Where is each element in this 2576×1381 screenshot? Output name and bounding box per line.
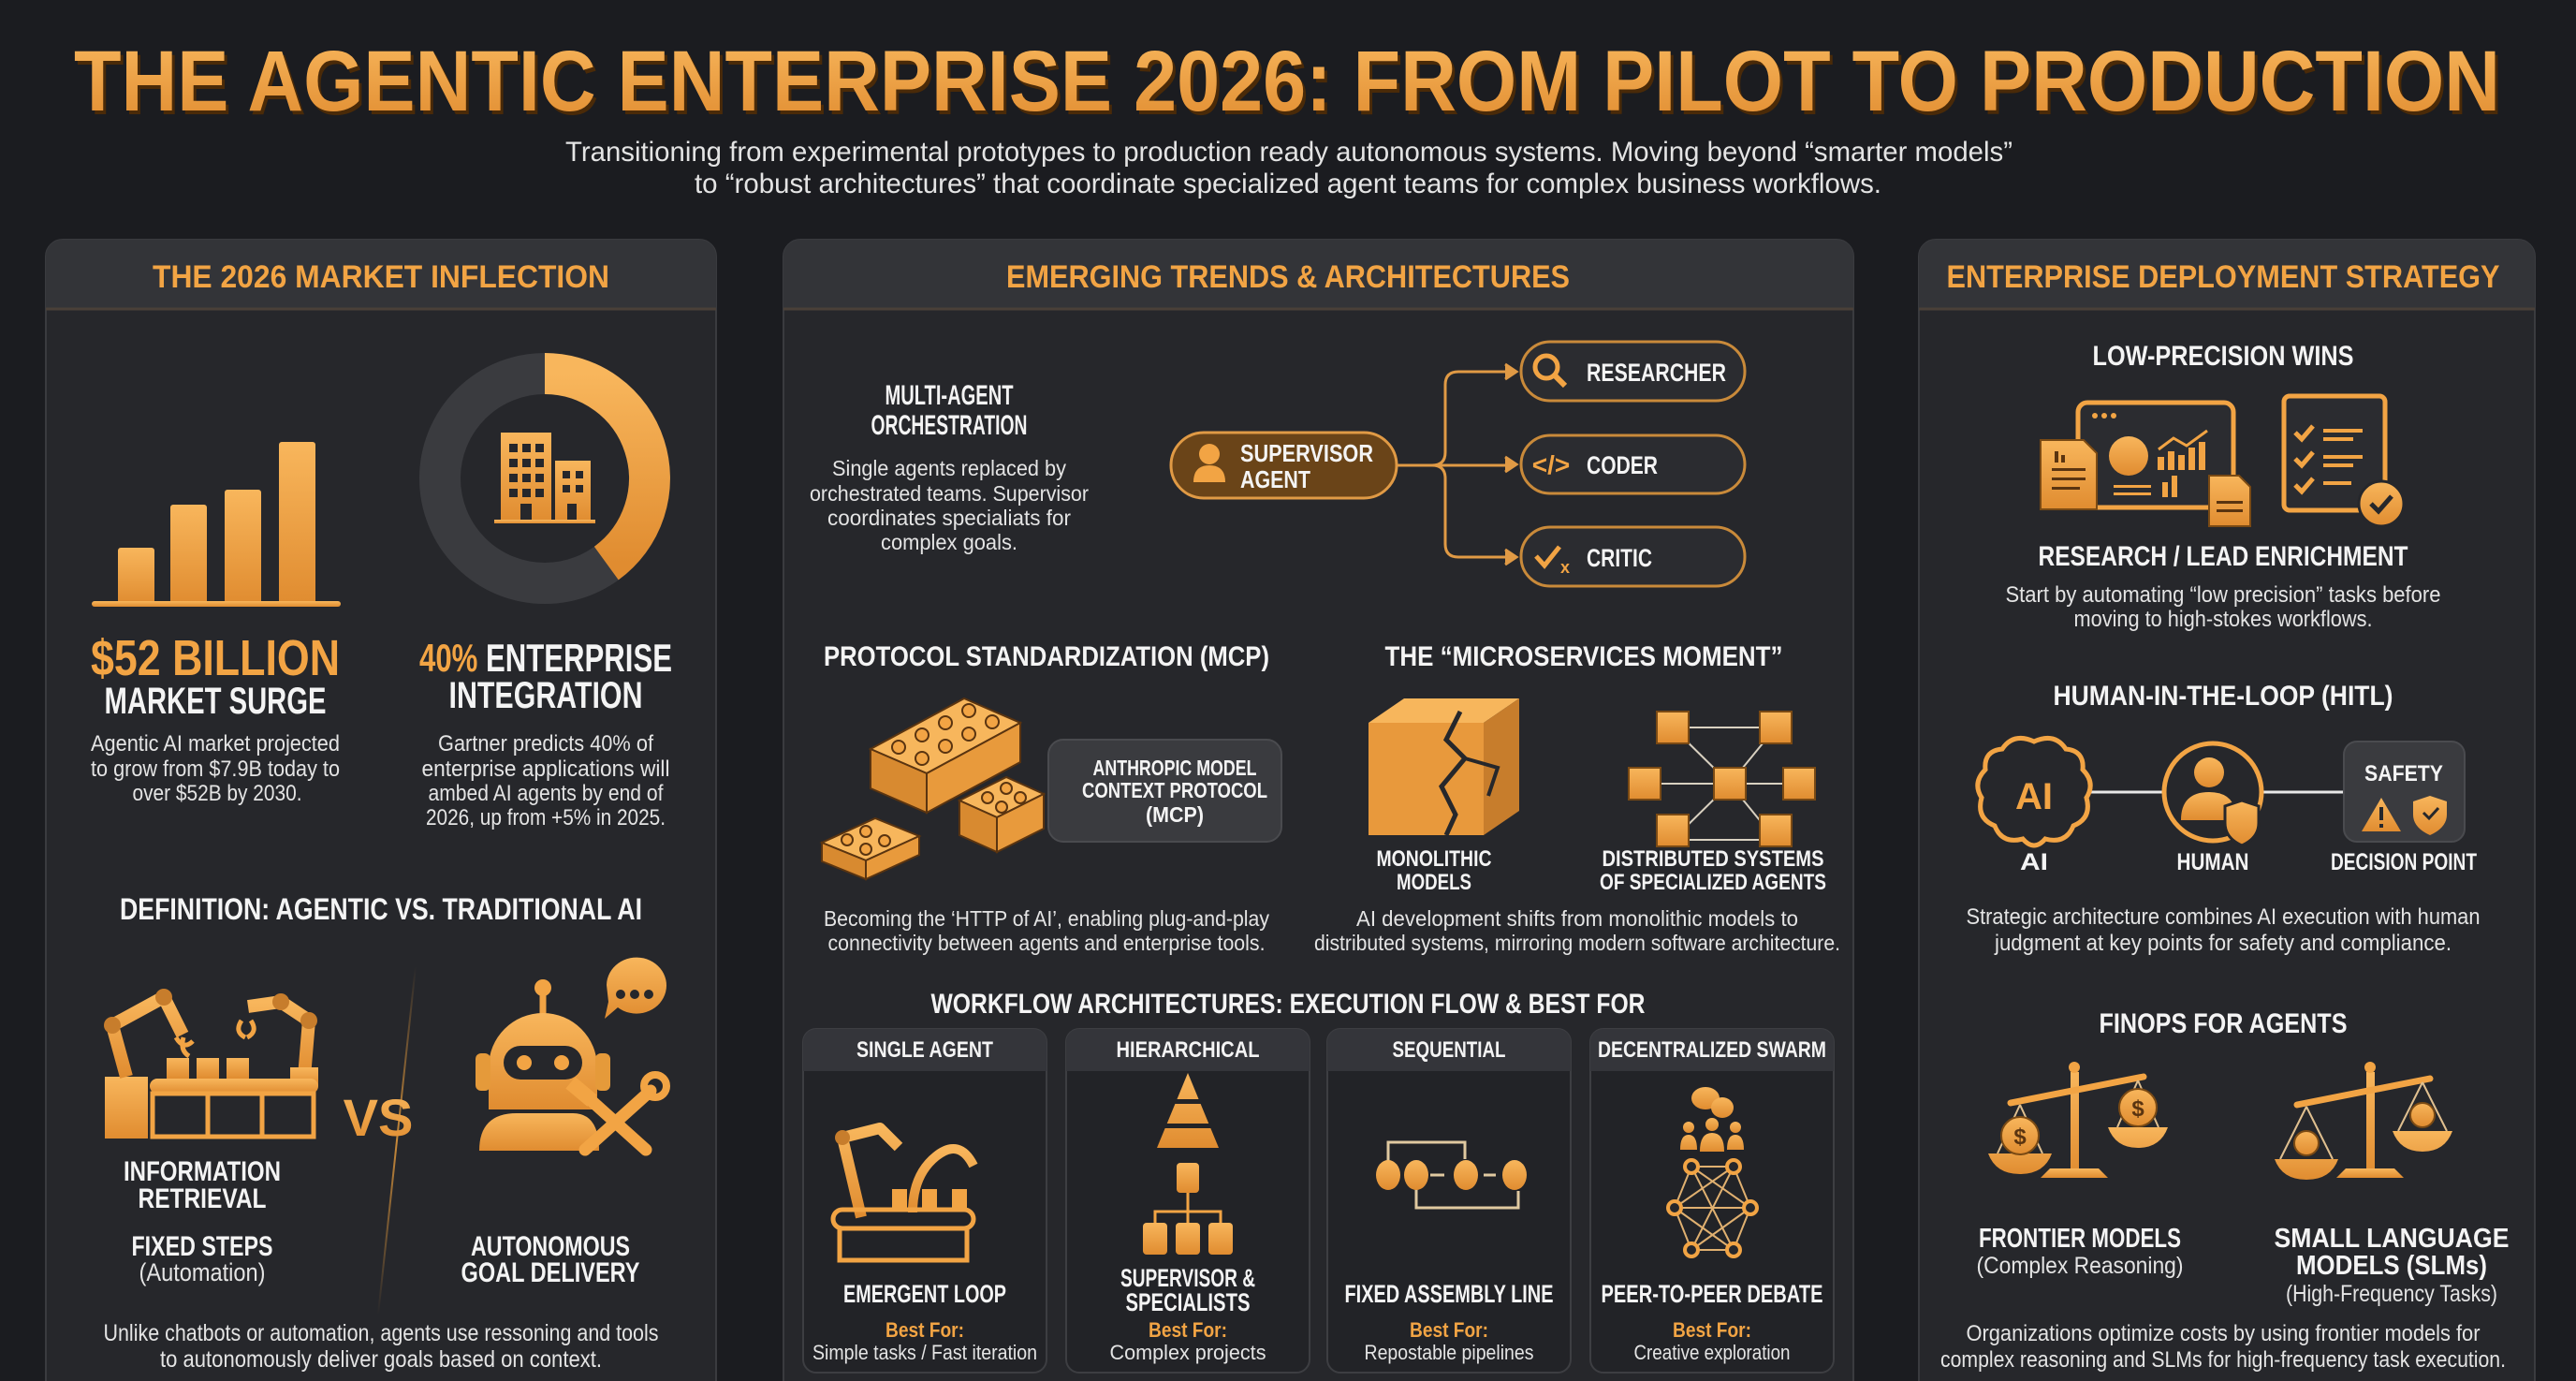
card: hierarchical: [1066, 1029, 1310, 1373]
heading: human in the loop: HUMAN-IN-THE-LOOP (HITL): [2054, 681, 2393, 712]
pill: coder: </>: [1532, 450, 1570, 479]
labels: traditional: (Automation): [139, 1258, 266, 1286]
heading: protocol standardization: PROTOCOL STANDARDIZATION (MCP): [824, 641, 1269, 672]
card: single agent: [803, 1029, 1046, 1373]
labels: traditional: [124, 1156, 281, 1286]
heading: deployment strategy: ENTERPRISE DEPLOYMENT STRATEGY: [1947, 259, 2500, 295]
research text: Start by automating “low precision” tasks before: [2005, 582, 2441, 608]
heading: finops: FINOPS FOR AGENTS: [2099, 1008, 2348, 1039]
vs divider: [344, 966, 416, 1315]
hitl labels: DECISION POINT: [2331, 849, 2477, 875]
card: decentralized swarm: [1590, 1029, 1834, 1373]
heading: workflow architectures: WORKFLOW ARCHITECTURES: EXECUTION FLOW & BEST FOR: [930, 989, 1646, 1020]
icon: ai brain: [1978, 738, 2090, 845]
stat: 40% enterprise: Gartner predicts 40% of: [438, 731, 653, 757]
mcp text: [824, 906, 1269, 955]
hitl diagram: [1978, 738, 2465, 845]
research text: [2005, 541, 2441, 632]
donut chart 40%: [440, 374, 650, 583]
labels: small language models: [2275, 1224, 2509, 1307]
labels: small language models: SMALL LANGUAGE: [2275, 1224, 2509, 1254]
multi-agent text: Single agents replaced by: [832, 456, 1066, 480]
card: sequential: Best For:: [1410, 1318, 1488, 1342]
heading: microservices moment: THE “MICROSERVICES MOMENT”: [1385, 641, 1782, 672]
finops text: complex reasoning and SLMs for high-frequency task execution.: [1940, 1347, 2506, 1373]
icon: factory robot arms: [104, 989, 318, 1139]
labels: agentic: AUTONOMOUS: [471, 1231, 630, 1262]
card: hierarchical: HIERARCHICAL: [1116, 1037, 1260, 1063]
heading: emerging trends: EMERGING TRENDS & ARCHITECTURES: [1006, 259, 1570, 295]
labels: frontier models: FRONTIER MODELS: [1979, 1224, 2181, 1254]
icon: safety decision box: SAFETY: [2364, 761, 2443, 786]
panel: deployment strategy: [1919, 240, 2535, 1381]
labels: monolithic vs distributed: MODELS: [1397, 870, 1471, 895]
stat: 40% enterprise: 40% ENTERPRISE: [419, 636, 672, 680]
icon: robot with tools: [476, 958, 666, 1151]
labels: monolithic vs distributed: OF SPECIALIZED AGENTS: [1600, 870, 1826, 895]
microservices text: AI development shifts from monolithic models to: [1356, 906, 1798, 931]
stat: $52 billion: to grow from $7.9B today to: [91, 757, 340, 782]
pill: researcher: [1521, 342, 1745, 401]
icon: monolithic cube: [1368, 698, 1519, 835]
research text: RESEARCH / LEAD ENRICHMENT: [2039, 541, 2408, 572]
pill: critic: [1521, 527, 1745, 586]
panel: market inflection: [46, 240, 716, 1381]
icon: scale slm: [2275, 1062, 2452, 1180]
icon: buildings: [494, 433, 595, 523]
labels: frontier models: [1977, 1224, 2183, 1279]
card: decentralized swarm: Best For:: [1673, 1318, 1751, 1342]
multi-agent text: MULTI-AGENT: [886, 380, 1013, 411]
stat: 40% enterprise: [419, 636, 672, 830]
supervisor agent pill: AGENT: [1240, 465, 1310, 493]
card: hierarchical: Complex projects: [1110, 1341, 1266, 1364]
icon: checklist: [2284, 396, 2404, 526]
card: single agent: Simple tasks / Fast iteration: [812, 1341, 1037, 1364]
pill: critic: x: [1560, 558, 1570, 577]
mcp callout box: CONTEXT PROTOCOL: [1082, 778, 1267, 802]
stat: 40% enterprise: INTEGRATION: [449, 675, 642, 716]
icon: dashboard: [2041, 403, 2250, 526]
stat: $52 billion: [91, 630, 340, 806]
supervisor agent pill: SUPERVISOR: [1240, 439, 1373, 467]
multi-agent text: coordinates specialiats for: [827, 506, 1071, 530]
card: decentralized swarm: Creative exploration: [1634, 1341, 1790, 1364]
card: single agent: EMERGENT LOOP: [843, 1280, 1006, 1308]
card: single agent: Best For:: [886, 1318, 964, 1342]
definition text: to autonomously deliver goals based on context.: [160, 1346, 602, 1373]
definition text: Unlike chatbots or automation, agents use ressoning and tools: [103, 1320, 659, 1346]
multi-agent text: [810, 380, 1089, 554]
labels: small language models: MODELS (SLMs): [2296, 1251, 2487, 1281]
card: sequential: [1327, 1029, 1571, 1373]
labels: monolithic vs distributed: [1376, 846, 1826, 895]
multi-agent text: ORCHESTRATION: [871, 410, 1028, 441]
icon: scale frontier: $: [2131, 1096, 2144, 1122]
labels: agentic: [461, 1231, 640, 1288]
hitl text: Strategic architecture combines AI execution with human: [1966, 904, 2481, 930]
stat: 40% enterprise: 2026, up from +5% in 2025.: [426, 805, 666, 830]
microservices text: [1314, 906, 1840, 955]
labels: agentic: GOAL DELIVERY: [461, 1257, 640, 1288]
icon: scale frontier: [1988, 1062, 2168, 1178]
pill: critic: CRITIC: [1587, 544, 1652, 572]
subtitle: Transitioning from experimental prototypes to production ready autonomous systems. Moving beyond “smarter models”: [565, 137, 2012, 168]
hitl labels: HUMAN: [2177, 849, 2248, 875]
mcp text: connectivity between agents and enterprise tools.: [827, 931, 1266, 955]
stat: $52 billion: MARKET SURGE: [105, 681, 326, 722]
finops text: [1940, 1321, 2506, 1373]
stat: $52 billion: $52 BILLION: [91, 630, 340, 686]
card: hierarchical: Best For:: [1149, 1318, 1227, 1342]
card: sequential: SEQUENTIAL: [1393, 1037, 1505, 1063]
icon: human: [2164, 743, 2261, 845]
icon: distributed network: [1629, 712, 1815, 846]
heading: market inflection: THE 2026 MARKET INFLECTION: [153, 259, 609, 295]
icon: hierarchy: [1143, 1073, 1233, 1255]
labels: traditional: RETRIEVAL: [139, 1183, 266, 1214]
definition text: [103, 1320, 659, 1373]
stat: 40% enterprise: ambed AI agents by end of: [429, 781, 664, 806]
card: hierarchical: SPECIALISTS: [1125, 1288, 1251, 1316]
hitl labels: [2020, 849, 2477, 875]
hitl text: judgment at key points for safety and compliance.: [1994, 931, 2452, 956]
vs divider: VS: [344, 1088, 413, 1147]
labels: frontier models: (Complex Reasoning): [1977, 1253, 2183, 1279]
card: sequential: FIXED ASSEMBLY LINE: [1344, 1280, 1554, 1308]
bar chart: [92, 442, 341, 607]
supervisor agent pill: [1171, 433, 1397, 498]
subtitle: [565, 137, 2012, 199]
heading: low-precision wins: LOW-PRECISION WINS: [2093, 341, 2353, 372]
stat: $52 billion: over $52B by 2030.: [133, 781, 301, 806]
pill: coder: CODER: [1587, 451, 1658, 479]
card: hierarchical: SUPERVISOR &: [1120, 1264, 1255, 1292]
icon: swarm: [1668, 1087, 1757, 1256]
icon: assembly robots: [833, 1128, 973, 1260]
labels: monolithic vs distributed: MONOLITHIC: [1376, 846, 1492, 872]
heading: definition: DEFINITION: AGENTIC VS. TRADITIONAL AI: [120, 892, 642, 926]
mcp callout box: [1048, 740, 1281, 842]
panel: emerging trends: [783, 240, 1853, 1381]
mcp callout box: (MCP): [1146, 802, 1204, 827]
mcp callout box: ANTHROPIC MODEL: [1093, 756, 1256, 780]
hitl text: [1966, 904, 2481, 956]
labels: small language models: (High-Frequency Tasks): [2286, 1281, 2497, 1307]
mcp text: Becoming the ‘HTTP of AI’, enabling plug-and-play: [824, 906, 1269, 931]
icon: ai brain: AI: [2015, 776, 2053, 817]
arrows: supervisor to specialists: [1397, 364, 1516, 565]
research text: moving to high-stokes workflows.: [2074, 607, 2372, 632]
labels: traditional: FIXED STEPS: [131, 1231, 273, 1262]
pill: researcher: RESEARCHER: [1587, 359, 1726, 387]
card: single agent: SINGLE AGENT: [856, 1037, 993, 1063]
multi-agent text: orchestrated teams. Supervisor: [810, 481, 1089, 506]
multi-agent text: complex goals.: [881, 530, 1017, 554]
card: decentralized swarm: DECENTRALIZED SWARM: [1598, 1037, 1826, 1063]
labels: monolithic vs distributed: DISTRIBUTED SYSTEMS: [1603, 846, 1823, 872]
pill: coder: [1521, 435, 1745, 493]
icon: safety decision box: [2344, 742, 2465, 842]
icon: lego bricks: [822, 698, 1044, 879]
icon: scale frontier: $: [2013, 1124, 2027, 1150]
finops text: Organizations optimize costs by using frontier models for: [1966, 1321, 2481, 1346]
subtitle: to “robust architectures” that coordinate specialized agent teams for complex business workflows.: [695, 169, 1881, 199]
card: sequential: Repostable pipelines: [1365, 1341, 1533, 1364]
card: decentralized swarm: PEER-TO-PEER DEBATE: [1601, 1280, 1823, 1308]
hitl labels: AI: [2020, 849, 2048, 875]
labels: traditional: INFORMATION: [124, 1156, 281, 1187]
icon: sequential flow: [1376, 1142, 1527, 1208]
stat: 40% enterprise: enterprise applications will: [421, 757, 670, 782]
stat: $52 billion: Agentic AI market projected: [91, 731, 340, 757]
microservices text: distributed systems, mirroring modern software architecture.: [1314, 931, 1840, 955]
